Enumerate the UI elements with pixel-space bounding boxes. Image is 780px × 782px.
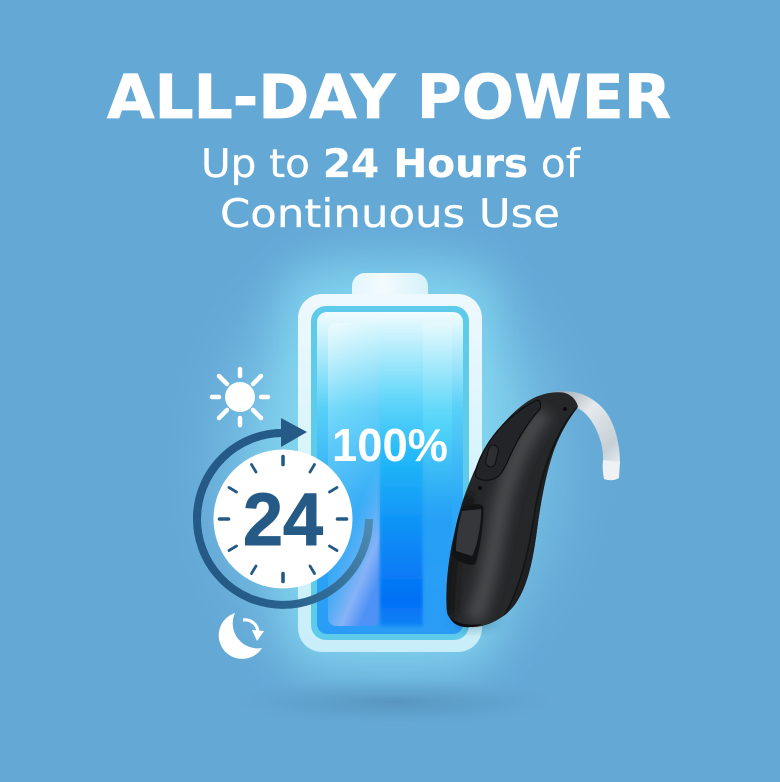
battery inner band [311,306,469,640]
title: ALL-DAY POWER [107,63,671,133]
clock number 24: 24 [243,478,323,561]
icon: moon with arrow [219,613,264,659]
battery centre segment [380,320,423,626]
infographic canvas [106,72,670,716]
microphone dots [478,486,482,490]
rocker slot [484,444,500,468]
floor shadow [215,676,575,728]
battery glow [150,180,630,750]
battery right segment [423,323,452,626]
ear hook tube [553,391,620,463]
clock face [214,450,352,588]
rocker control [475,400,541,480]
body shading [449,400,590,625]
battery cap [352,273,428,296]
icon: sun [212,369,268,425]
hearing aid body [446,392,578,627]
hearing aid shadow [450,612,500,630]
battery halo [285,270,495,665]
clock with arrow [197,418,369,605]
subtitle [201,141,581,237]
arrow head [281,418,307,447]
battery shell [298,294,482,652]
hearing aid lower base [449,615,482,627]
hearing aid [446,391,620,630]
battery left segment [328,323,380,626]
ear hook tip [603,460,620,480]
clock ticks [220,456,346,582]
subtitle line 1: Up to 24 Hours of [201,141,581,187]
100% label: 100% [332,419,448,471]
battery [298,273,482,652]
side button [453,504,483,565]
subtitle line 2: Continuous Use [220,191,560,237]
battery fill [317,312,463,634]
circular arrow ring [197,433,369,605]
